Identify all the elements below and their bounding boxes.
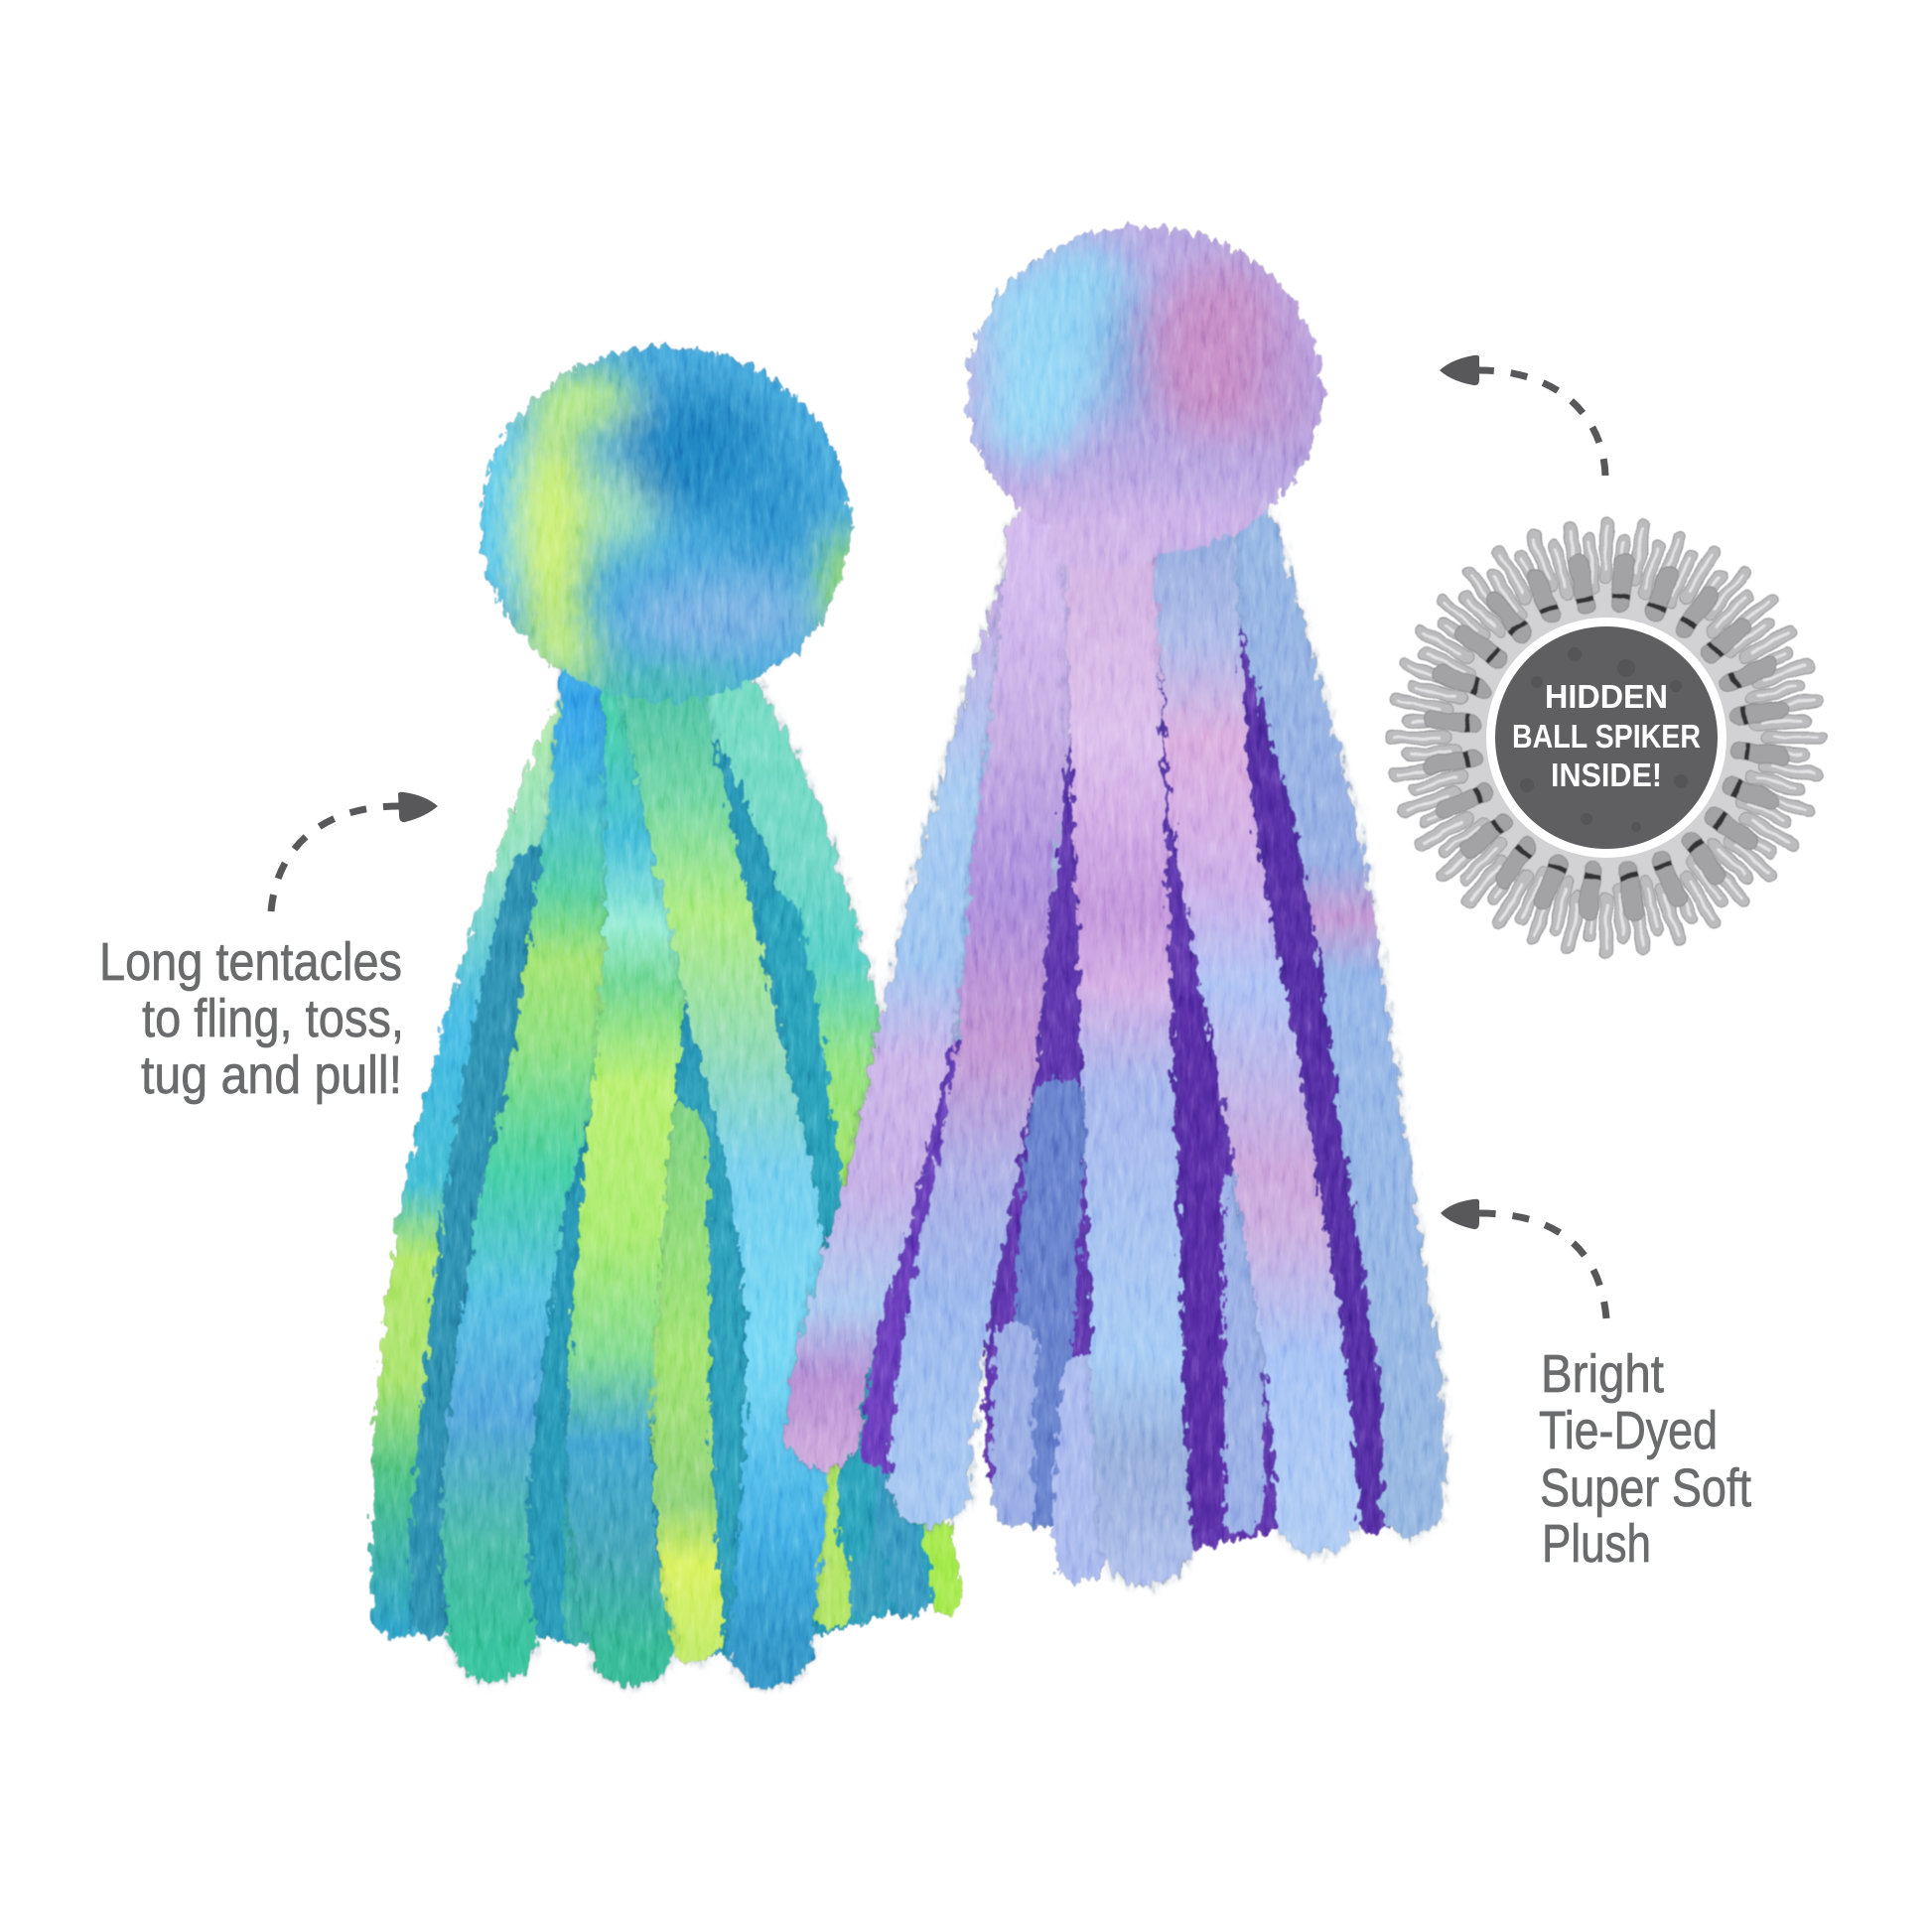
- arrow: top right callout arrow: [1440, 355, 1605, 476]
- badge text: [1512, 678, 1701, 793]
- purple plush: furry head: [955, 215, 1336, 567]
- badge text: INSIDE!: [1551, 757, 1662, 793]
- green plush: far left tentacle: [400, 696, 592, 1608]
- green plush: left-centre tentacle: [484, 690, 604, 1639]
- badge: dark disc: [1495, 626, 1718, 849]
- green plush: centre tentacle: [609, 690, 647, 1645]
- badge text: HIDDEN: [1545, 678, 1668, 715]
- purple plush: left shoulder fill: [850, 542, 1059, 1244]
- purple plush: centre tentacle: [1111, 530, 1146, 1540]
- purple plush: left dark flat underside: [884, 1062, 956, 1449]
- label: bright tie-dyed super soft plush: [1539, 1344, 1751, 1574]
- purple plush: outer left tentacle: [823, 579, 1041, 1432]
- badge: white ring: [1486, 618, 1726, 858]
- arrow: lower right callout arrow: [1441, 1199, 1606, 1318]
- label: bright tie-dyed super soft plush: Super Soft: [1540, 1458, 1751, 1518]
- green plush: lower right tentacle stubs: [818, 1453, 946, 1608]
- green plush: dark teal underbody: [407, 696, 936, 1657]
- green plush: right-centre tentacle: [661, 690, 787, 1645]
- label: long tentacles: [99, 932, 404, 1105]
- purple plush: centre dark flat: [1194, 1018, 1201, 1509]
- label: long tentacles: to fling, toss,: [142, 989, 404, 1048]
- green plush: center flat undersides: [579, 1090, 733, 1626]
- badge text: BALL SPIKER: [1512, 718, 1701, 755]
- purple plush: outer right tentacle: [1244, 530, 1414, 1506]
- green plush: narrow lime tentacle: [678, 1135, 694, 1632]
- label: long tentacles: Long tentacles: [99, 932, 402, 992]
- arrow: left callout arrow: [271, 792, 438, 911]
- green plush: far right tentacle: [727, 696, 869, 1282]
- spiker ball: spikes: [1373, 504, 1840, 971]
- spiker ball illustration with badge: [1373, 504, 1840, 971]
- purple plush: back stubs: [1013, 1108, 1241, 1559]
- purple plush: right-centre tentacle: [1194, 530, 1318, 1513]
- green tie-dyed octopus plush: [400, 333, 946, 1657]
- purple plush: second left tentacle: [930, 542, 1047, 1484]
- purple plush: dark underbody: [986, 542, 1392, 1553]
- label: bright tie-dyed super soft plush: Tie-Dyed: [1539, 1401, 1718, 1460]
- purple tie-dyed octopus plush: [823, 215, 1414, 1559]
- green plush: left flat underside: [433, 870, 536, 1614]
- label: bright tie-dyed super soft plush: Bright: [1541, 1344, 1664, 1404]
- green plush: furry head: [464, 333, 870, 715]
- purple plush: neck: [1046, 515, 1160, 569]
- badge: disc dimples: [1520, 647, 1688, 832]
- purple plush: right dark flat: [1249, 730, 1374, 1509]
- label: long tentacles: tug and pull!: [141, 1045, 402, 1105]
- green plush: right flat underside: [778, 913, 856, 1540]
- label: bright tie-dyed super soft plush: Plush: [1542, 1514, 1651, 1574]
